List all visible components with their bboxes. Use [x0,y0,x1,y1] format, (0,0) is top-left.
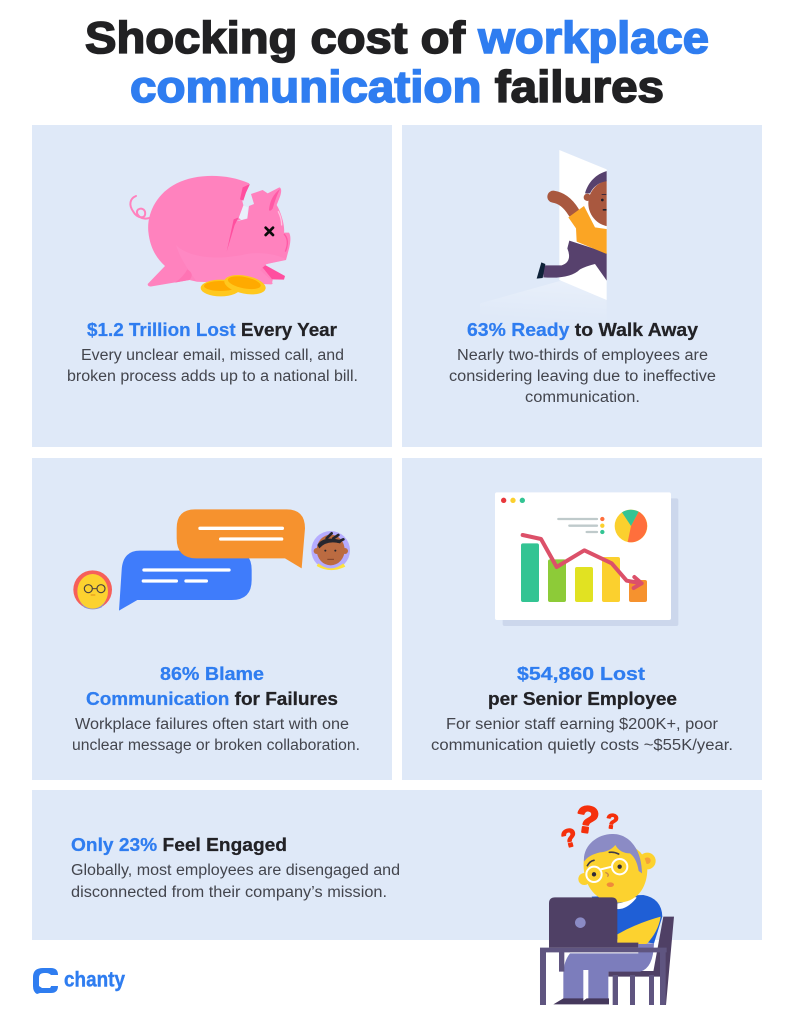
heading: 63% Ready to Walk Away [467,319,699,340]
panel: $54,860 lost per senior employee [402,458,762,780]
heading: $54,860 Lost [517,663,645,684]
logo: chanty [33,968,125,994]
body text [71,862,400,901]
body text [449,347,716,406]
icon: chanty logo mark [33,968,58,994]
body text: Nearly two-thirds of employees are [457,347,708,364]
body text: communication quietly costs ~$55K/year. [431,737,733,754]
title [85,14,709,112]
icon: chat bubbles with avatars [73,509,350,611]
heading [488,663,677,709]
chart: declining bars on dashboard [495,492,678,626]
icon: person leaving through door [536,150,607,300]
heading: Only 23% Feel Engaged [71,834,287,855]
question marks: ? [558,823,581,854]
question marks: ? [573,797,602,842]
panel: only 23% feel engaged [32,790,762,940]
body text [72,716,360,754]
body text: unclear message or broken collaboration. [72,737,360,754]
heading: $1.2 Trillion Lost Every Year [87,319,337,340]
logo: chanty: chanty [64,968,125,992]
icon: broken piggy bank [130,176,290,298]
heading: Communication for Failures [86,688,338,709]
question marks [558,797,620,854]
panel: 86% blame communication [32,458,392,780]
heading [86,663,338,709]
body text [431,716,733,754]
panel: $1.2 trillion lost [32,125,392,447]
question marks: ? [604,810,620,834]
icon: confused person at laptop [540,797,674,1005]
body text: broken process adds up to a national bill. [67,368,358,385]
body text: considering leaving due to ineffective [449,368,716,385]
body text: communication. [525,389,640,406]
avatar: person with dark hair [311,531,350,570]
orange speech bubble [177,509,305,568]
blue speech bubble [119,551,252,611]
heading: per Senior Employee [488,688,677,709]
title: Shocking cost of workplace [85,14,709,63]
body text: Globally, most employees are disengaged and [71,862,400,879]
body text: For senior staff earning $200K+, poor [446,716,718,733]
panel: 63% ready to walk away [402,125,762,447]
body text: Every unclear email, missed call, and [81,347,344,364]
avatar: person with glasses [73,570,112,609]
body text: Workplace failures often start with one [75,716,349,733]
heading: 86% Blame [160,663,264,684]
body text [67,347,358,385]
body text: disconnected from their company’s mission. [71,884,387,901]
title: communication failures [130,63,664,112]
